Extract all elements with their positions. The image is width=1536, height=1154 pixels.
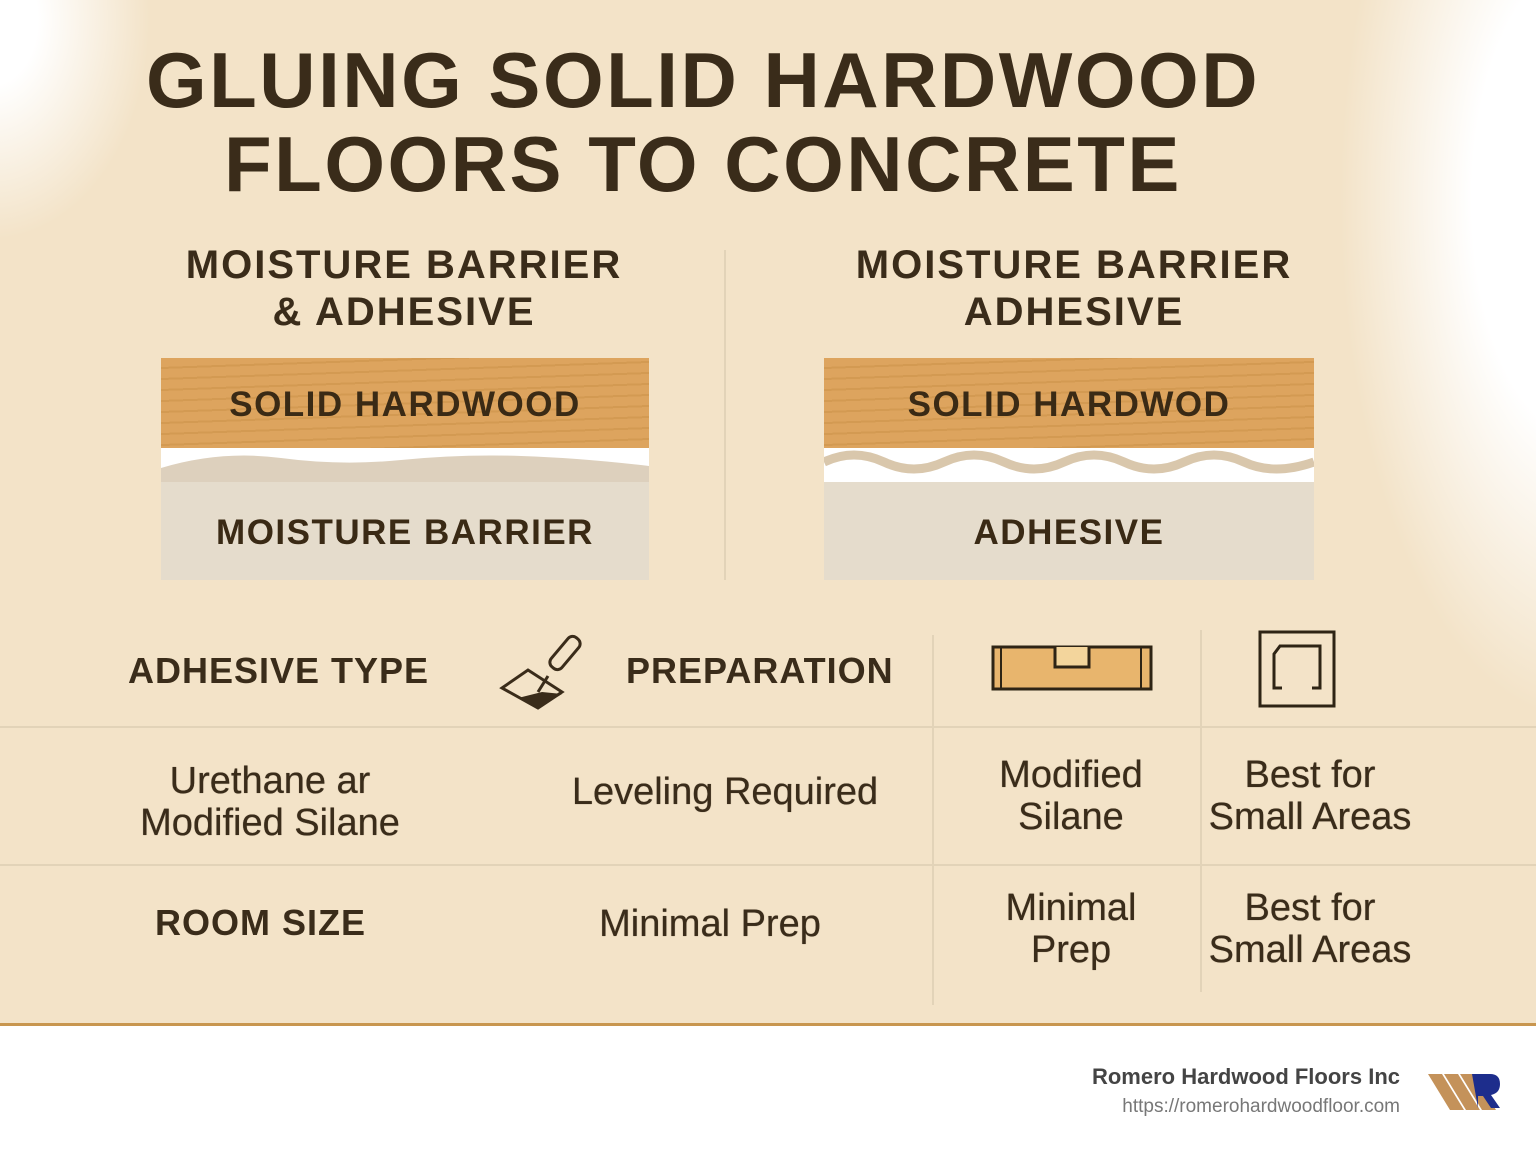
row 2 cells: ROOM SIZE (155, 902, 366, 943)
text: Best for (1245, 754, 1375, 796)
diagram: right layers (824, 358, 1314, 580)
title: GLUING SOLID HARDWOOD (146, 36, 1260, 124)
heading: right (856, 243, 1292, 334)
heading: right: ADHESIVE (964, 290, 1184, 334)
footer: company (1092, 1064, 1400, 1117)
title (146, 36, 1260, 208)
layer: solid hardwood: SOLID HARDWOOD (229, 385, 581, 424)
diagram: left layers (161, 358, 649, 580)
text: Modified (999, 754, 1143, 796)
text: Small Areas (1209, 796, 1411, 838)
layer: adhesive (824, 482, 1314, 580)
icon: trowel (499, 634, 582, 710)
table grid lines (0, 726, 1536, 728)
text: Minimal Prep (599, 903, 821, 945)
heading: left (186, 243, 622, 334)
text: Best for (1245, 887, 1375, 929)
footer: company: https://romerohardwoodfloor.com (1122, 1096, 1400, 1117)
layer: solid hardwood (161, 358, 649, 448)
layer: adhesive: ADHESIVE (974, 513, 1164, 552)
text: Small Areas (1209, 929, 1411, 971)
heading: left: MOISTURE BARRIER (186, 243, 622, 287)
row 1 cells (140, 760, 400, 844)
table header: adhesive type: ADHESIVE TYPE (128, 650, 429, 691)
icon: square frame (1258, 630, 1336, 708)
layer: moisture barrier (161, 482, 649, 580)
layer: solid hardwood (824, 358, 1314, 448)
heading: left: & ADHESIVE (272, 290, 536, 334)
layer: solid hardwood: SOLID HARDWOD (908, 385, 1230, 424)
logo (1428, 1074, 1500, 1110)
text: Leveling Required (572, 771, 878, 813)
layer: wave (824, 448, 1314, 482)
row 1 cells: Modified Silane (140, 802, 400, 844)
row 1 cells: Urethane ar (170, 760, 370, 802)
table header: preparation: PREPARATION (626, 650, 894, 691)
footer: company: Romero Hardwood Floors Inc (1092, 1064, 1400, 1089)
layer: moisture barrier: MOISTURE BARRIER (216, 513, 594, 552)
text: Silane (1018, 796, 1124, 838)
text: Prep (1031, 929, 1111, 971)
layer: wave (161, 448, 649, 482)
text: Minimal (1006, 887, 1136, 929)
title: FLOORS TO CONCRETE (224, 120, 1182, 208)
icon: level (992, 646, 1152, 690)
heading: right: MOISTURE BARRIER (856, 243, 1292, 287)
